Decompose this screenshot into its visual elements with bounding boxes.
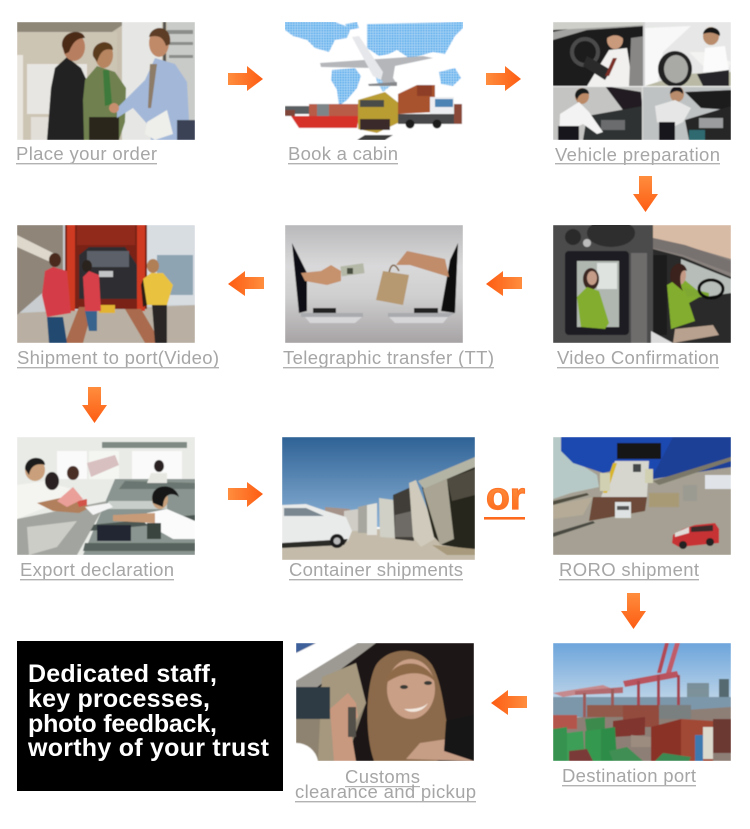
caption: container shipments: Container shipments — [289, 559, 463, 580]
caption: telegraphic transfer: Telegraphic transfer (TT) — [283, 347, 494, 368]
man centre — [83, 66, 126, 140]
photo: RORO shipment, ship ramp and cars — [553, 437, 731, 555]
photo: shipment to port, car on red carrier truck — [17, 225, 195, 343]
caption: vehicle preparation: Vehicle preparation — [555, 144, 720, 165]
text: line 3: photo feedback, — [28, 710, 217, 738]
panel: trust statement on black — [17, 641, 283, 791]
man right — [117, 58, 190, 140]
arrow: order to cabin — [228, 66, 263, 91]
arrow: shipment to export declaration — [82, 387, 107, 423]
caption: customs clearance and pickup: Customs — [345, 766, 420, 787]
text: line 2: key processes, — [28, 685, 210, 713]
photo: customs clearance and pickup, woman holding keys — [296, 643, 474, 761]
arrow: video confirmation to telegraphic transfer — [486, 271, 522, 296]
caption: export declaration: Export declaration — [20, 559, 174, 580]
caption: customs clearance and pickup — [295, 766, 476, 802]
arrow: destination port to pickup — [491, 690, 527, 715]
caption: destination port: Destination port — [562, 765, 696, 786]
text: line 4: worthy of your trust — [27, 734, 270, 762]
arrow: export declaration to container shipments — [228, 482, 263, 507]
photo: container shipments — [282, 437, 475, 560]
photo: book a cabin, world map and transport — [285, 22, 463, 140]
caption: customs clearance and pickup: clearance and pickup — [295, 781, 476, 802]
photo: telegraphic transfer, hands from laptops — [285, 225, 463, 343]
label: or: or — [486, 476, 525, 518]
caption: video confirmation: Video Confirmation — [557, 347, 719, 368]
photo: vehicle preparation, four inspection views — [553, 22, 731, 140]
man left — [46, 57, 87, 140]
photo: place your order, businessmen shaking hands — [17, 22, 195, 140]
caption: shipment to port: Shipment to port(Video) — [17, 347, 219, 368]
caption: place your order: Place your order — [16, 143, 157, 164]
arrow: telegraphic transfer to shipment — [228, 271, 264, 296]
photo: video confirmation, camera screen and driver — [553, 219, 731, 343]
caption: book a cabin: Book a cabin — [288, 143, 398, 164]
text: line 1: Dedicated staff, — [28, 660, 217, 688]
photo: export declaration, customs office — [17, 437, 195, 555]
arrow: cabin to preparation — [486, 66, 521, 91]
caption: RORO shipment: RORO shipment — [559, 559, 699, 580]
photo: destination port, cranes and containers — [553, 643, 731, 761]
arrow: RORO to destination port — [621, 593, 646, 629]
arrow: preparation to video confirmation — [633, 176, 658, 212]
